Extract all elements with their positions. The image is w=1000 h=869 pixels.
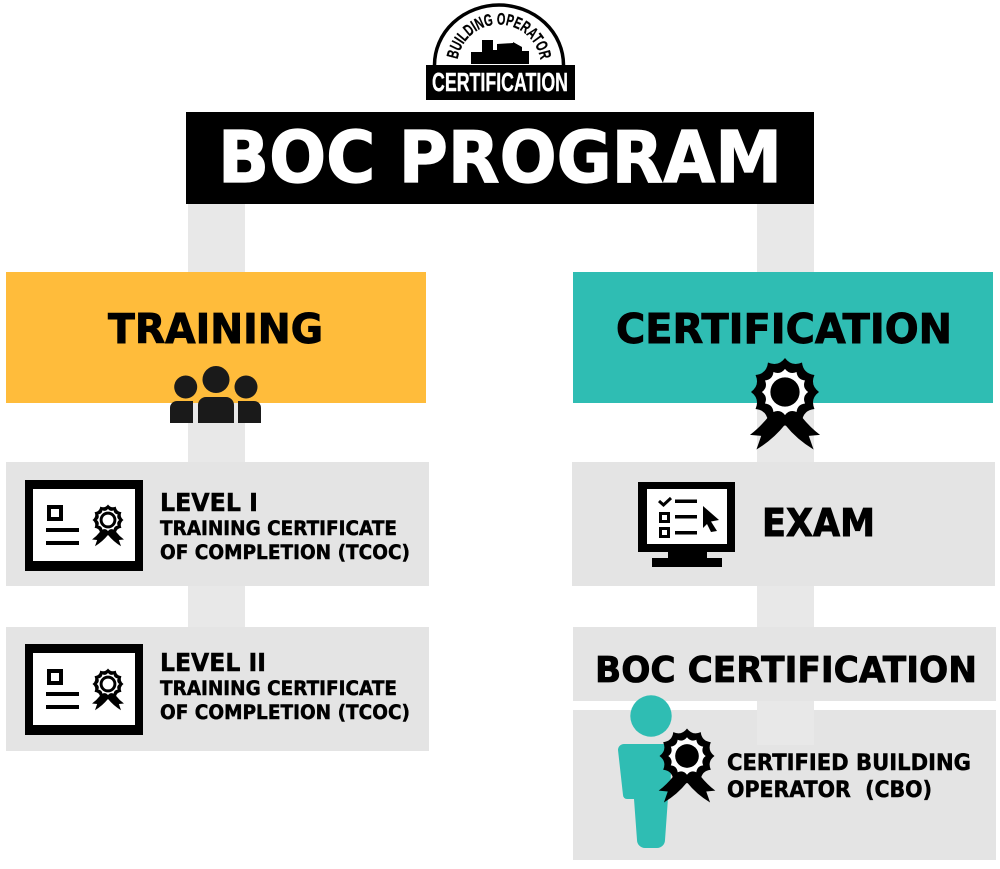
text: level I: TRAINING CERTIFICATE [160,517,397,540]
icon: person [618,695,672,848]
panel: certification [573,272,993,403]
heading: training: TRAINING [108,305,323,353]
panel: training [6,272,426,403]
logo: Building Operator Certification: CERTIFICATION [432,67,568,97]
title banner: BOC PROGRAM [218,116,782,199]
panel: BOC certification heading: BOC CERTIFICATION [595,650,977,691]
connector stub [757,701,814,745]
icon: computer monitor with checklist [638,482,735,567]
logo: Building Operator Certification [426,3,575,100]
icon: rosette [659,728,715,802]
text: certified building operator [727,751,971,803]
text: certified building operator: OPERATOR (CBO) [727,778,932,803]
panel: level I [6,462,429,586]
panel: certified building operator [573,695,996,860]
connector: certification to exam [757,403,814,462]
connector: title to certification [757,204,814,272]
panel: BOC certification heading [573,627,996,701]
heading: exam: EXAM [762,501,875,545]
connector: title to training [188,204,245,272]
logo: Building Operator Certification: BUILDING OPERATOR [446,12,551,60]
panel: level II [6,627,429,751]
text: level II: LEVEL II [160,648,266,677]
connector: training to level I [188,403,245,462]
connector: exam to BOC certification [757,586,814,627]
heading: certification: CERTIFICATION [616,305,952,353]
text: level I [160,488,410,564]
icon: certificate [25,480,143,571]
icon: group of people [170,366,261,423]
text: level I: LEVEL I [160,488,258,517]
connector: level I to level II [188,586,245,627]
text: level II: TRAINING CERTIFICATE [160,677,397,700]
icon: certificate [25,644,143,735]
text: level I: OF COMPLETION (TCOC) [160,541,410,564]
panel: exam [572,462,995,586]
text: level II: OF COMPLETION (TCOC) [160,701,410,724]
text: certified building operator: CERTIFIED BUILDING [727,751,971,776]
text: level II [160,648,410,724]
icon: rosette [750,358,820,449]
